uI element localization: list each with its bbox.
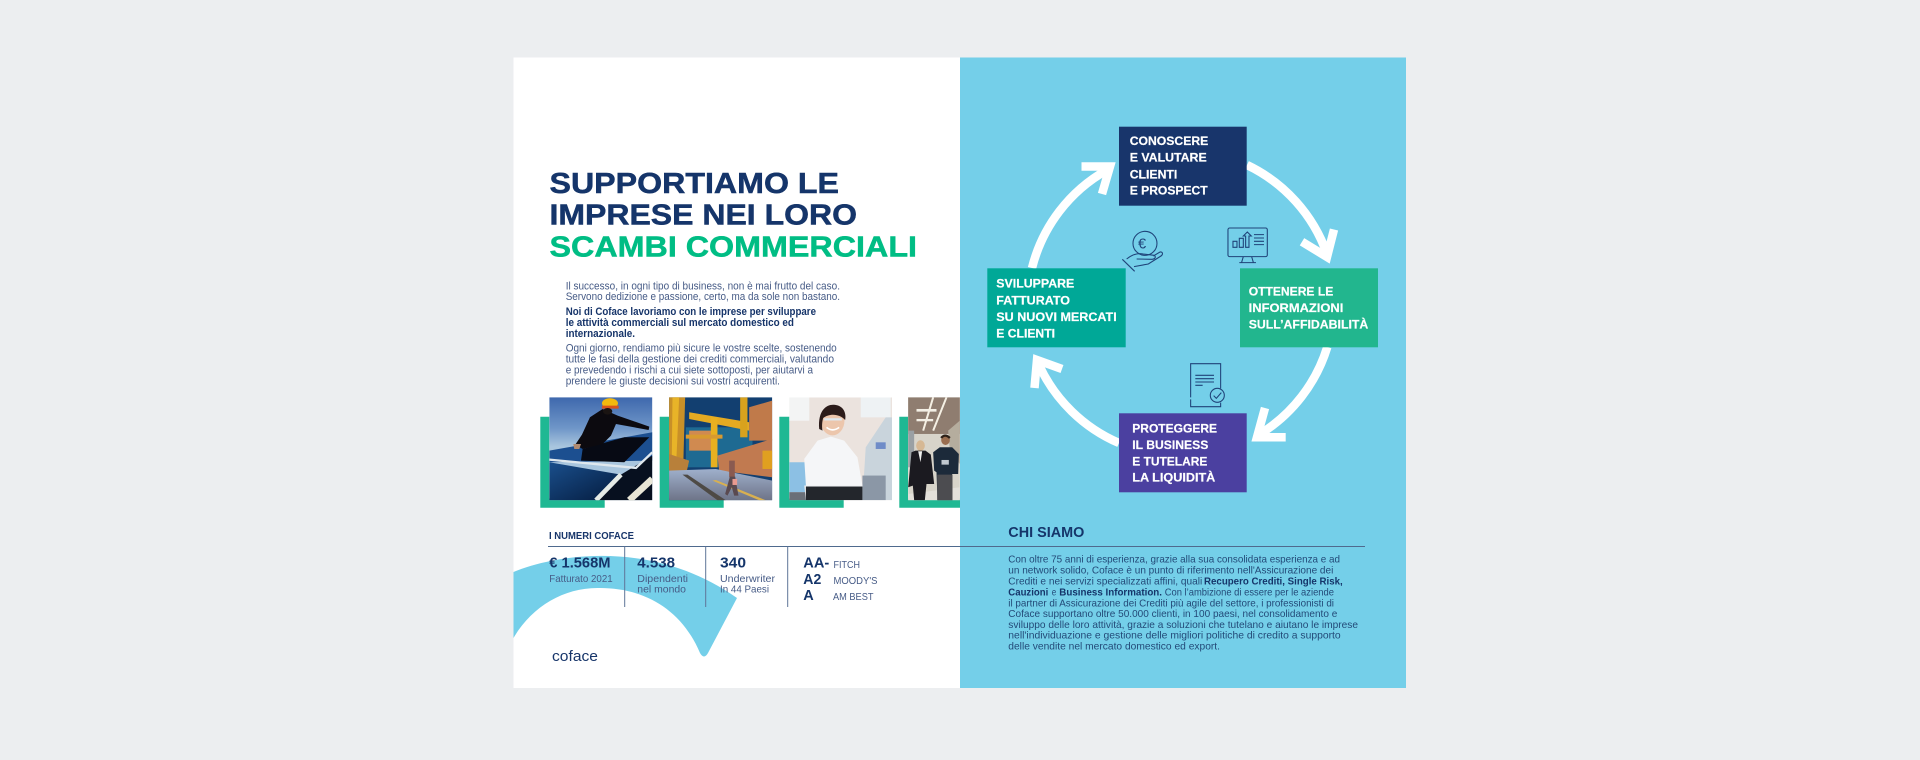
photo 2: port crane: [660, 397, 772, 508]
stat: ratings: AA-: [803, 556, 829, 572]
box: conoscere: CLIENTI: [1130, 167, 1177, 181]
stat: underwriters: In 44 Paesi: [720, 584, 769, 596]
box: ottenere: OTTENERE LE: [1249, 284, 1333, 298]
box: conoscere: E PROSPECT: [1130, 183, 1208, 197]
stat: employees: [637, 556, 688, 596]
box: ottenere: [1240, 268, 1378, 347]
stat: employees: nel mondo: [637, 584, 686, 596]
intro text block: Noi di Coface lavoriamo con le imprese per sviluppare: [566, 306, 816, 318]
text block: chi siamo: nell'individuazione e gestione delle migliori politiche di credito a supporto: [1008, 630, 1341, 642]
arrow: growth to clients: [1032, 166, 1110, 268]
stat: revenue: [549, 556, 613, 585]
text block: chi siamo: Coface supportano oltre 50.000 clienti, in 100 paesi, nel consolidamento e: [1008, 608, 1337, 620]
box: proteggere: PROTEGGERE: [1132, 421, 1217, 435]
text block: chi siamo: delle vendite nel mercato domestico ed export.: [1008, 640, 1220, 652]
intro text block: Servono dedizione e passione, certo, ma da sole non bastano.: [566, 291, 840, 303]
photo strip: [540, 397, 960, 508]
title: SUPPORTIAMO LE: [550, 168, 839, 200]
photo 3: scientist in lab: [779, 397, 892, 508]
photo 4: warehouse walk: [899, 397, 960, 508]
stat: employees: Dipendenti: [637, 573, 688, 585]
text block: chi siamo: Recupero Crediti, Single Risk,: [1204, 576, 1343, 588]
stat: employees: 4.538: [637, 556, 675, 572]
stat: ratings: [803, 556, 878, 604]
text block: chi siamo: il partner di Assicurazione dei Crediti più agile del settore, i professionisti di: [1008, 597, 1334, 609]
rule across pages: [548, 546, 1365, 548]
box: conoscere: E VALUTARE: [1130, 151, 1207, 165]
stat: underwriters: [720, 556, 776, 596]
intro text block: prendere le giuste decisioni sui vostri acquirenti.: [566, 375, 780, 387]
stat: ratings: MOODY'S: [834, 575, 878, 587]
stat: ratings: FITCH: [834, 559, 860, 571]
intro text block: Ogni giorno, rendiamo più sicure le vostre scelte, sostenendo: [566, 343, 837, 355]
intro text block: tutte le fasi della gestione dei crediti commerciali, valutando: [566, 354, 834, 366]
stat: underwriters: 340: [720, 556, 746, 572]
text block: chi siamo: un network solido, Coface è un punto di riferimento nell'Assicurazione dei: [1008, 565, 1333, 577]
text block: chi siamo: e: [1052, 586, 1056, 598]
box: sviluppare: SU NUOVI MERCATI: [996, 310, 1117, 324]
icon: contract document: [1191, 364, 1224, 407]
text block: chi siamo: Business Information.: [1059, 586, 1162, 598]
stat: ratings: AM BEST: [833, 591, 874, 603]
icon: monitor chart: [1228, 228, 1267, 263]
box: sviluppare: E CLIENTI: [996, 326, 1055, 340]
intro text block: le attività commerciali sul mercato domestico ed: [566, 317, 794, 329]
box: proteggere: LA LIQUIDITÀ: [1132, 470, 1215, 485]
box: proteggere: IL BUSINESS: [1132, 438, 1208, 452]
logo: coface: coface: [552, 648, 598, 665]
box: proteggere: E TUTELARE: [1132, 454, 1207, 468]
stat: ratings: A: [803, 588, 814, 604]
intro text block: internazionale.: [566, 328, 635, 340]
box: sviluppare: [987, 268, 1126, 347]
stats heading: I NUMERI COFACE: [549, 530, 634, 542]
stat: revenue: Fatturato 2021: [549, 573, 613, 585]
text block: chi siamo: Crediti e nei servizi specializzati affini, quali: [1008, 576, 1202, 588]
photo 1: solar panel worker: [540, 397, 652, 508]
text block: chi siamo: Con oltre 75 anni di esperienza, grazie alla sua consolidata esperienza e ad: [1008, 554, 1340, 566]
panel: left white page: [514, 58, 960, 688]
box: sviluppare: FATTURATO: [996, 293, 1070, 307]
icon: euro in hand: [1122, 231, 1162, 271]
icon: euro in hand: €: [1138, 236, 1146, 252]
intro text block: e prevedendo i rischi a cui siete sottoposti, per aiutarvi a: [566, 364, 814, 376]
stat: underwriters: Underwriter: [720, 573, 776, 585]
text block: chi siamo: Con l’ambizione di essere per le aziende: [1165, 586, 1334, 598]
stat: revenue: € 1.568M: [549, 556, 610, 572]
stats dividers: [625, 546, 788, 607]
panel: right blue page: [960, 58, 1406, 688]
arrow: clients to information: [1247, 165, 1334, 257]
text block: chi siamo: [1008, 554, 1358, 652]
stat: ratings: A2: [803, 572, 821, 588]
box: ottenere: INFORMAZIONI: [1249, 301, 1343, 315]
heading: chi siamo: CHI SIAMO: [1008, 525, 1084, 541]
box: proteggere: [1119, 413, 1247, 492]
text block: chi siamo: Cauzioni: [1008, 586, 1048, 598]
box: ottenere: SULL’AFFIDABILITÀ: [1249, 316, 1368, 331]
blue swoosh: [514, 556, 737, 656]
text block: chi siamo: sviluppo delle loro attività, grazie a soluzioni che tutelano e aiutano le imprese: [1008, 619, 1358, 631]
title: [550, 168, 917, 264]
arrow: information to protection: [1257, 347, 1327, 437]
box: conoscere: [1119, 127, 1247, 206]
intro text block: [566, 280, 840, 387]
title: IMPRESE NEI LORO: [550, 200, 857, 232]
intro text block: Il successo, in ogni tipo di business, non è mai frutto del caso.: [566, 280, 840, 292]
arrow: protection to growth: [1034, 360, 1119, 443]
title: SCAMBI COMMERCIALI: [550, 232, 917, 264]
box: sviluppare: SVILUPPARE: [996, 277, 1074, 291]
box: conoscere: CONOSCERE: [1130, 134, 1208, 148]
